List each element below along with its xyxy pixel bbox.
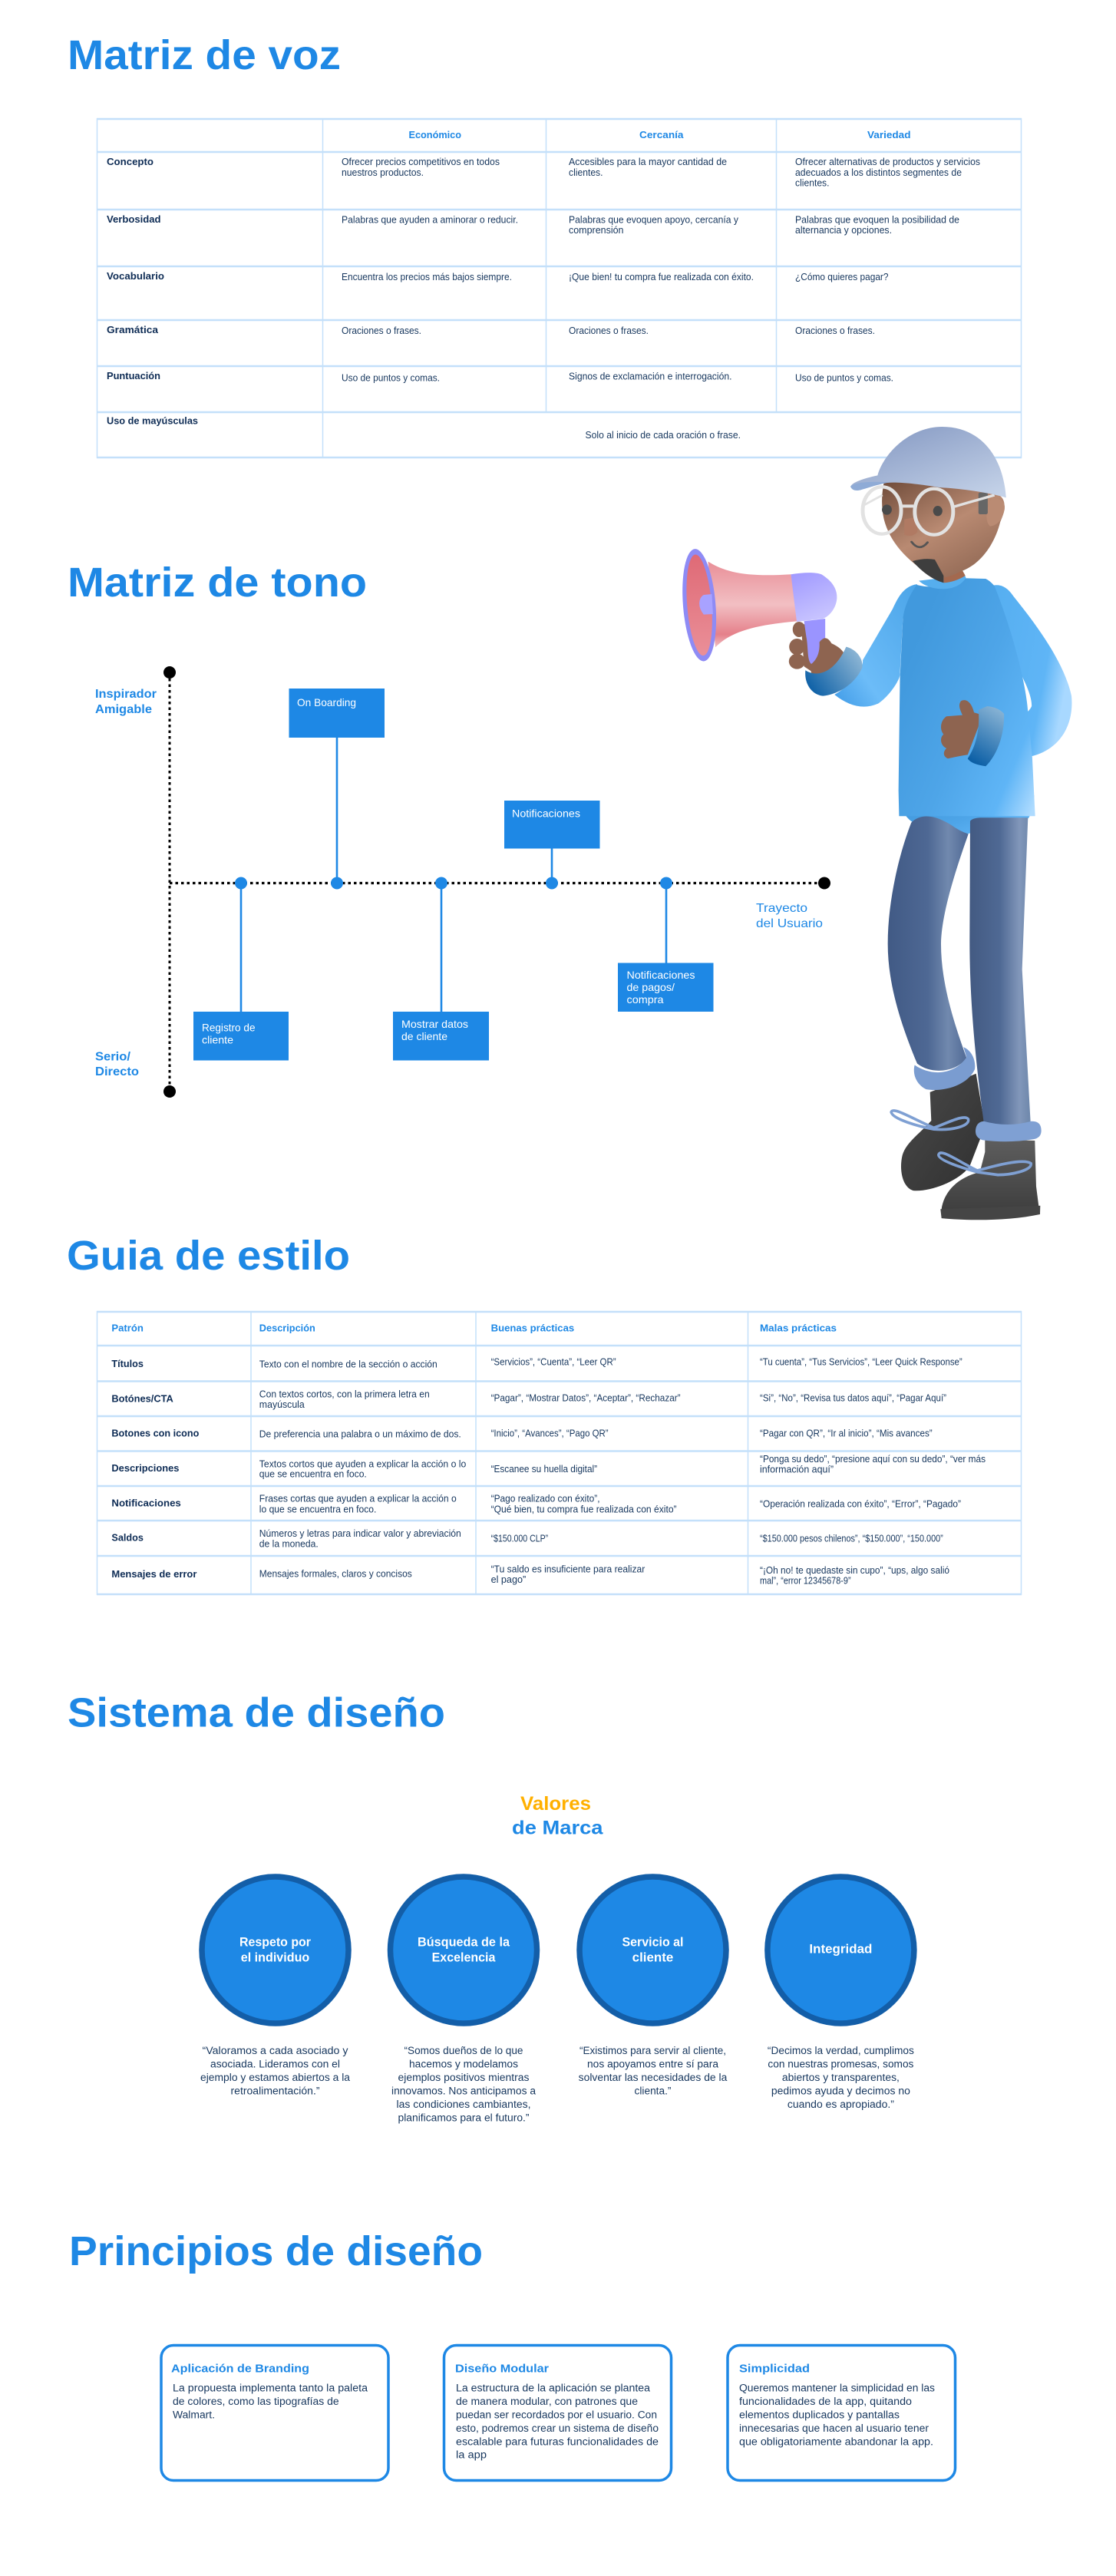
hearing aid — [979, 493, 988, 514]
quote: nos apoyamos entre sí para — [587, 2059, 718, 2069]
point: Registro de cliente — [193, 877, 289, 1061]
quote: “Valoramos a cada asociado y — [203, 2045, 348, 2056]
point: Registro de cliente: Registro de — [202, 1022, 256, 1034]
quote — [391, 2045, 536, 2123]
card: Simplicidad — [728, 2346, 955, 2481]
row: Verbosidad: comprensión — [569, 225, 624, 236]
row: Gramática: Oraciones o frases. — [342, 325, 421, 336]
left lace — [891, 1111, 969, 1130]
quote — [768, 2045, 914, 2110]
row: Concepto: Ofrecer precios competitivos en todos — [342, 157, 500, 167]
megaphone inner post — [699, 594, 713, 615]
right boot — [941, 1139, 1038, 1210]
quote: las condiciones cambiantes, — [396, 2099, 531, 2110]
card: Simplicidad: Simplicidad — [739, 2363, 810, 2376]
row: Verbosidad — [107, 213, 959, 236]
card: Simplicidad: que obligatoriamente abandonar la app. — [739, 2436, 933, 2447]
row: Botones con icono: De preferencia una palabra o un máximo de dos. — [259, 1428, 461, 1439]
circle: Respeto por — [239, 1936, 312, 1950]
heading: Valores de Marca: de Marca — [512, 1818, 604, 1839]
axis label: Serio Directo — [95, 1050, 139, 1078]
point: Notificaciones de pagos/compra — [618, 877, 714, 1012]
axis label: Serio Directo: Directo — [95, 1065, 139, 1078]
goatee — [913, 559, 943, 583]
right leg — [969, 817, 1031, 1125]
left leg — [888, 816, 969, 1071]
row: Descripciones: “Escanee su huella digital” — [491, 1464, 597, 1475]
cap brim — [850, 482, 890, 490]
row: Mensajes de error: “Tu saldo es insuficiente para realizar — [491, 1564, 645, 1574]
axis label: Serio Directo: Serio/ — [95, 1050, 131, 1064]
card: Diseño Modular — [444, 2346, 671, 2481]
title: Principios de diseño: Principios de diseño — [69, 2228, 483, 2274]
gripping hand — [810, 638, 845, 675]
card: Simplicidad: elementos duplicados y pantallas — [739, 2409, 900, 2420]
header row: Descripción — [259, 1323, 315, 1334]
circle: Servicio al — [622, 1936, 683, 1950]
axis label: Trayecto del Usuario — [756, 902, 823, 930]
panel: voice matrix table — [97, 118, 1022, 458]
panel: value Servicio al cliente — [579, 1877, 728, 2097]
axis label: Trayecto del Usuario: Trayecto — [756, 902, 807, 915]
megaphone mouth — [683, 553, 715, 656]
megaphone handle — [804, 619, 825, 664]
right arm — [991, 585, 1071, 758]
left trouser cuff — [914, 1047, 975, 1090]
row: Botones con icono: Botones con icono — [111, 1428, 199, 1439]
shirt hem — [900, 795, 1034, 834]
title: Sistema de diseño: Sistema de diseño — [68, 1690, 445, 1736]
row: Saldos: Saldos — [111, 1532, 144, 1544]
quote: abiertos y transparentes, — [782, 2072, 900, 2083]
vertical axis — [163, 666, 176, 1098]
quote: “Somos dueños de lo que — [404, 2045, 523, 2056]
row: Concepto: clientes. — [795, 178, 829, 189]
row: Notificaciones: Frases cortas que ayuden a explicar la acción o — [259, 1494, 457, 1504]
card: Diseño Modular: puedan ser recordados por el usuario. Con — [456, 2409, 657, 2420]
row: Verbosidad: alternancia y opciones. — [795, 225, 892, 236]
circle: cliente — [632, 1951, 673, 1965]
row: Mensajes de error: Mensajes de error — [111, 1568, 196, 1580]
right sleeve cuff — [968, 706, 1004, 766]
row: Verbosidad: Palabras que evoquen la posibilidad de — [795, 215, 959, 226]
character upper body — [679, 427, 1071, 816]
card: Aplicación de Branding: Aplicación de Branding — [171, 2363, 309, 2376]
row: Mensajes de error: “¡Oh no! te quedaste sin cupo”, “ups, algo salió — [760, 1565, 949, 1576]
card: Diseño Modular: la app — [456, 2449, 487, 2461]
character lower body — [888, 795, 1042, 1220]
card: Diseño Modular: La estructura de la aplicación se plantea — [456, 2383, 651, 2394]
row: Descripciones: Descripciones — [111, 1462, 179, 1474]
axis label: Trayecto del Usuario: del Usuario — [756, 917, 823, 930]
card: Simplicidad: innecesarias que hacen al usuario tener — [739, 2422, 929, 2434]
left boot — [901, 1074, 985, 1191]
title: Matriz de tono: Matriz de tono — [68, 560, 367, 606]
row: Verbosidad: Verbosidad — [107, 213, 161, 225]
row: Notificaciones: Notificaciones — [111, 1497, 181, 1508]
horizontal axis — [170, 877, 830, 889]
card: Aplicación de Branding — [161, 2346, 388, 2481]
circle — [579, 1877, 726, 2023]
row: Mensajes de error: mal”, “error 12345678-9” — [760, 1575, 851, 1586]
row: Botónes/CTA — [111, 1389, 946, 1410]
panel: value Integridad — [768, 1877, 914, 2110]
card: Aplicación de Branding: Walmart. — [173, 2409, 215, 2420]
mouth — [912, 542, 927, 547]
row: Vocabulario: Vocabulario — [107, 270, 164, 282]
axis label: Inspirador Amigable — [95, 688, 157, 716]
row: Mensajes de error: Mensajes formales, claros y concisos — [259, 1568, 412, 1579]
quote: ejemplo y estamos abiertos a la — [200, 2072, 351, 2083]
row: Uso de mayúsculas: Solo al inicio de cada oración o frase. — [585, 430, 741, 441]
illustration: character with megaphone — [679, 427, 1071, 1220]
header row: Cercanía — [639, 129, 684, 140]
point: On Boarding: On Boarding — [297, 696, 356, 708]
point: Notificaciones de pagos/compra: compra — [626, 993, 664, 1006]
row: Descripciones: que se encuentra en foco. — [259, 1469, 367, 1480]
heading: Valores de Marca — [512, 1793, 604, 1839]
card: Diseño Modular: escalable para futuras funcionalidades de — [456, 2436, 659, 2447]
quote: cuando es apropiado.” — [787, 2099, 894, 2110]
quote: “Existimos para servir al cliente, — [579, 2045, 726, 2056]
row: Vocabulario: ¡Que bien! tu compra fue realizada con éxito. — [569, 272, 754, 282]
row: Descripciones: información aquí” — [760, 1465, 834, 1475]
panel: style guide table — [97, 1311, 1022, 1595]
row: Gramática: Oraciones o frases. — [569, 325, 649, 336]
point: On Boarding — [289, 689, 385, 889]
row: Puntuación: Uso de puntos y comas. — [342, 373, 440, 384]
row: Verbosidad: Palabras que ayuden a aminorar o reducir. — [342, 215, 518, 226]
row: Botones con icono: “Pagar con QR”, “Ir al inicio”, “Mis avances” — [760, 1428, 933, 1439]
row: Concepto — [107, 156, 980, 189]
header row: Buenas prácticas — [491, 1323, 574, 1334]
row: Saldos: Números y letras para indicar valor y abreviación — [259, 1528, 461, 1539]
row: Descripciones: “Ponga su dedo”, “presione aquí con su dedo”, “ver más — [760, 1454, 986, 1465]
quote — [200, 2045, 351, 2097]
row: Notificaciones — [111, 1494, 961, 1514]
row: Saldos — [111, 1528, 943, 1550]
row: Botónes/CTA: “Si”, “No”, “Revisa tus datos aquí”, “Pagar Aquí” — [760, 1393, 946, 1404]
row: Títulos: “Tu cuenta”, “Tus Servicios”, “Leer Quick Response” — [760, 1357, 962, 1368]
row: Concepto: Accesibles para la mayor cantidad de — [569, 157, 727, 167]
panel: value Búsqueda de la Excelencia — [390, 1877, 537, 2123]
cap — [850, 427, 1006, 497]
row: Uso de mayúsculas: Uso de mayúsculas — [107, 414, 198, 427]
row: Notificaciones: “Pago realizado con éxito”, — [491, 1494, 600, 1504]
row: Vocabulario — [107, 270, 889, 282]
quote: pedimos ayuda y decimos no — [771, 2085, 910, 2097]
quote: innovamos. Nos anticipamos a — [391, 2085, 536, 2097]
fingers behind handle — [789, 622, 816, 674]
quote: asociada. Lideramos con el — [210, 2059, 340, 2069]
quote: ejemplos positivos mientras — [398, 2072, 530, 2083]
nose — [904, 517, 917, 536]
point: Notificaciones de pagos/compra: Notificaciones — [626, 969, 695, 981]
quote — [579, 2045, 728, 2097]
panel: value Respeto por el individuo — [200, 1877, 351, 2097]
title: Guia de estilo: Guia de estilo — [67, 1233, 350, 1279]
row: Títulos: “Servicios”, “Cuenta”, “Leer QR” — [491, 1357, 616, 1368]
circle: Integridad — [809, 1942, 872, 1956]
header row: Variedad — [867, 129, 911, 140]
circle: Excelencia — [432, 1951, 496, 1965]
point: Registro de cliente: cliente — [202, 1034, 233, 1046]
card: Aplicación de Branding: La propuesta implementa tanto la paleta — [173, 2383, 368, 2394]
point: Notificaciones: Notificaciones — [512, 807, 580, 820]
row: Gramática: Oraciones o frases. — [795, 325, 875, 336]
row: Notificaciones: lo que se encuentra en foco. — [259, 1504, 376, 1514]
row: Títulos: Texto con el nombre de la sección o acción — [259, 1359, 437, 1370]
quote: solventar las necesidades de la — [579, 2072, 728, 2083]
row: Botónes/CTA: Con textos cortos, con la primera letra en — [259, 1389, 430, 1399]
row: Notificaciones: “Operación realizada con éxito”, “Error”, “Pagado” — [760, 1498, 961, 1509]
heading: Valores de Marca: Valores — [520, 1793, 591, 1815]
card: Diseño Modular: Diseño Modular — [455, 2363, 549, 2376]
row: Concepto: Concepto — [107, 156, 154, 167]
row: Puntuación: Uso de puntos y comas. — [795, 373, 893, 384]
row: Botónes/CTA: Botónes/CTA — [111, 1393, 173, 1405]
row: Botones con icono — [111, 1428, 933, 1439]
point: Mostrar datos de cliente: de cliente — [401, 1030, 447, 1042]
row: Uso de mayúsculas — [107, 414, 741, 441]
megaphone body — [791, 573, 837, 622]
megaphone cone — [708, 562, 798, 647]
row: Descripciones: Textos cortos que ayuden a explicar la acción o lo — [259, 1458, 466, 1469]
torso — [899, 578, 1035, 816]
point: Mostrar datos de cliente: Mostrar datos — [401, 1018, 468, 1030]
quote: hacemos y modelamos — [409, 2059, 518, 2069]
header row — [408, 129, 911, 140]
row: Notificaciones: “Qué bien, tu compra fue realizada con éxito” — [491, 1504, 677, 1514]
ear — [986, 497, 1005, 527]
quote: planificamos para el futuro.” — [398, 2112, 530, 2123]
row: Botones con icono: “Inicio”, “Avances”, “Pago QR” — [491, 1428, 609, 1439]
megaphone rim — [679, 548, 720, 662]
card: Diseño Modular: esto, podremos crear un sistema de diseño — [456, 2422, 659, 2434]
axis label: Inspirador Amigable: Amigable — [95, 703, 152, 716]
quote: con nuestras promesas, somos — [768, 2059, 914, 2069]
row: Verbosidad: Palabras que evoquen apoyo, cercanía y — [569, 215, 739, 226]
row: Saldos: de la moneda. — [259, 1539, 319, 1550]
row: Vocabulario: Encuentra los precios más bajos siempre. — [342, 272, 512, 282]
row: Concepto: nuestros productos. — [342, 167, 424, 178]
card: Diseño Modular: de manera modular, con patrones que — [456, 2396, 638, 2407]
chart: tone matrix — [95, 666, 830, 1098]
quote: “Decimos la verdad, cumplimos — [768, 2045, 914, 2056]
circle: el individuo — [241, 1951, 309, 1965]
row: Gramática: Gramática — [107, 324, 159, 335]
row: Mensajes de error — [111, 1564, 949, 1586]
neck — [919, 570, 966, 589]
row: Puntuación — [107, 370, 893, 384]
row: Títulos — [111, 1357, 962, 1370]
table grid — [97, 118, 1022, 458]
header row: Malas prácticas — [760, 1323, 837, 1334]
header row: Económico — [408, 129, 461, 140]
quote: retroalimentación.” — [230, 2085, 319, 2097]
circle: Búsqueda de la — [418, 1936, 510, 1950]
head — [882, 482, 1005, 578]
right sole — [940, 1206, 1040, 1220]
circle — [202, 1877, 348, 2023]
table grid — [97, 1311, 1022, 1595]
row: Concepto: Ofrecer alternativas de productos y servicios — [795, 157, 980, 167]
circle — [390, 1877, 537, 2023]
card: Aplicación de Branding: de colores, como las tipografías de — [173, 2396, 339, 2407]
point: Mostrar datos de cliente — [393, 877, 489, 1061]
row: Gramática — [107, 324, 875, 336]
eyes — [882, 504, 892, 515]
card: Simplicidad: Queremos mantener la simplicidad en las — [739, 2383, 935, 2394]
header row: Patrón — [111, 1323, 144, 1334]
row: Vocabulario: ¿Cómo quieres pagar? — [795, 272, 889, 282]
row: Descripciones — [111, 1454, 986, 1480]
row: Botónes/CTA: “Pagar”, “Mostrar Datos”, “Aceptar”, “Rechazar” — [491, 1393, 681, 1404]
row: Puntuación: Puntuación — [107, 370, 160, 381]
row: Saldos: “$150.000 pesos chilenos”, “$150.000”, “150.000” — [760, 1534, 943, 1544]
row: Títulos: Títulos — [111, 1358, 144, 1369]
quote: clienta.” — [634, 2085, 671, 2097]
glasses — [863, 487, 995, 535]
card: Simplicidad: funcionalidades de la app, quitando — [739, 2396, 912, 2407]
point: Notificaciones de pagos/compra: de pagos/ — [626, 981, 675, 993]
header row — [111, 1323, 837, 1334]
row: Concepto: clientes. — [569, 167, 603, 178]
axis label: Inspirador Amigable: Inspirador — [95, 688, 157, 701]
row: Mensajes de error: el pago” — [491, 1574, 526, 1585]
open hand — [941, 700, 982, 758]
row: Concepto: adecuados a los distintos segmentes de — [795, 167, 962, 178]
right trouser cuff — [976, 1121, 1042, 1141]
title: Matriz de voz: Matriz de voz — [68, 32, 341, 78]
circle — [768, 1877, 914, 2023]
row: Saldos: “$150.000 CLP” — [491, 1534, 548, 1544]
left arm — [834, 584, 917, 707]
row: Puntuación: Signos de exclamación e interrogación. — [569, 372, 732, 382]
point: Notificaciones — [504, 801, 600, 889]
left sleeve cuff — [805, 647, 863, 696]
right lace — [939, 1153, 1031, 1175]
row: Botónes/CTA: mayúscula — [259, 1399, 305, 1410]
